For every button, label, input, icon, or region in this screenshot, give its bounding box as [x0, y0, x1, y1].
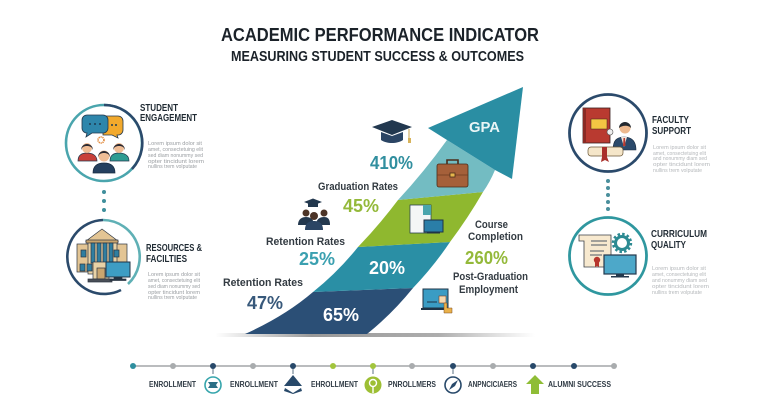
icon: laptop and hand: [421, 289, 452, 313]
panel: curriculum quality: [570, 218, 709, 296]
title: ACADEMIC PERFORMANCE INDICATOR: [221, 25, 539, 45]
timeline label 2: ENROLLMENT: [230, 380, 278, 389]
heading: resources and facilities: RESOURCES &: [146, 243, 202, 254]
heading: faculty support: [652, 115, 691, 137]
heading: faculty support: FACULTY: [652, 115, 689, 126]
label: course completion: [468, 219, 523, 243]
stat: 45%: 45%: [343, 196, 379, 216]
ground shadow: [215, 333, 535, 337]
ring: student engagement: [66, 105, 142, 181]
icon: discussion group: [78, 115, 129, 173]
timeline label 6: ALUMNI SUCCESS: [548, 380, 612, 389]
icon: campus building: [77, 229, 130, 282]
value: GPA: GPA: [469, 119, 500, 136]
text block: faculty: and nonummy diam sed: [653, 156, 707, 162]
text block: faculty: nullins trem volputate: [653, 168, 702, 174]
timeline label 4: PNROLLMERS: [388, 380, 437, 389]
text block: curriculum: opter tincidunt lorem: [652, 284, 709, 290]
segment: light teal: [398, 140, 495, 200]
timeline label 3: EHROLLMENT: [311, 380, 358, 389]
timeline dots: [130, 363, 617, 369]
chart: rising arrow: [245, 87, 523, 334]
label: retention rates upper: Retention Rates: [266, 236, 345, 248]
panel: faculty support: [570, 94, 710, 174]
text block: curriculum: [652, 266, 709, 296]
text block: faculty: [653, 145, 710, 174]
timeline stems: [213, 366, 453, 374]
value: 65%: 65%: [323, 305, 359, 325]
text block: resources: nullins trem volputate: [148, 295, 197, 301]
heading: student engagement: STUDENT: [140, 103, 178, 114]
text block: student engagement: sed diam nonummy sed: [148, 153, 203, 159]
label: post-graduation employment: Post-Graduation: [453, 271, 528, 283]
connector dots: left: [102, 190, 106, 212]
timeline track: [133, 365, 614, 367]
text block: faculty: Lorem ipsum dolor sit: [653, 145, 706, 151]
segment: green: [358, 192, 483, 247]
text block: resources: [148, 272, 200, 301]
icon: certificate, gear and monitor: [579, 234, 636, 278]
subtitle: MEASURING STUDENT SUCCESS & OUTCOMES: [231, 49, 524, 65]
segment: 65%: [245, 288, 413, 334]
stat: 25%: 25%: [299, 249, 335, 269]
text block: resources: amet, consectetuing elit: [148, 278, 200, 284]
heading: curriculum quality: CURRICULUM: [651, 229, 707, 240]
text block: student engagement: amet, consectetuing elit: [148, 147, 203, 153]
value: 20%: 20%: [369, 258, 405, 278]
timeline icon: navy compass: [445, 377, 461, 393]
heading: curriculum quality: [651, 229, 707, 251]
icon: book, teacher and diploma: [583, 108, 636, 162]
heading: faculty support: SUPPORT: [652, 126, 691, 137]
icon: document and monitor: [410, 205, 443, 234]
timeline label 5: ANPNCICIAERS: [468, 380, 518, 389]
label: post-graduation employment: Employment: [459, 284, 518, 296]
icon: graduation cap: [372, 120, 412, 143]
ring: curriculum: [570, 218, 646, 294]
label: retention rates lower: Retention Rates: [223, 277, 303, 289]
icon: briefcase: [437, 160, 468, 187]
heading: student engagement: [140, 103, 197, 124]
stat: 47%: 47%: [247, 293, 283, 313]
label: course completion: Completion: [468, 231, 523, 243]
label: course completion: Course: [475, 219, 508, 231]
text block: resources: Lorem ipsum dolor sit: [148, 272, 200, 278]
connector dots: right: [606, 179, 610, 211]
arrow head: [428, 87, 523, 179]
text block: faculty: opter tincidunt lorem: [653, 162, 710, 168]
timeline icon: green up arrow: [526, 375, 544, 394]
text block: student engagement: [148, 141, 204, 170]
stat: 410%: 410%: [370, 153, 413, 173]
segment: 20%: [313, 242, 450, 292]
timeline label 1: ENROLLMENT: [149, 380, 196, 389]
text block: curriculum: amet, consectetuing elit: [652, 272, 706, 278]
ring: faculty: [570, 94, 646, 172]
stat: 260%: 260%: [465, 248, 508, 268]
text block: curriculum: nullins trem volputate: [652, 290, 702, 296]
text block: curriculum: and nonummy diam sed: [652, 278, 707, 284]
text block: faculty: amet, consectetuing elit: [653, 151, 706, 157]
text block: curriculum: Lorem ipsum dolor sit: [652, 266, 706, 272]
text block: student engagement: nullins trem volputate: [148, 164, 197, 170]
timeline icon: teal badge: [205, 377, 221, 393]
heading: resources and facilities: [146, 243, 202, 265]
text block: student engagement: opter tincidunt lorem: [148, 159, 204, 165]
panel: student engagement: [66, 103, 204, 181]
text block: student engagement: Lorem ipsum dolor sit: [148, 141, 202, 147]
ring: resources: [67, 220, 140, 294]
icon: graduates group: [298, 198, 330, 230]
timeline icon: green badge: [364, 376, 382, 394]
timeline icon: navy pyramid: [284, 375, 302, 394]
text block: resources: opter tincidunt lorem: [148, 290, 200, 296]
heading: student engagement: ENGAGEMENT: [140, 113, 197, 124]
text block: resources: sed diam nonummy sed: [148, 284, 200, 290]
label: graduation rates: Graduation Rates: [318, 181, 398, 193]
timeline: [130, 363, 617, 394]
label: post-graduation employment: [453, 271, 528, 296]
panel: resources and facilities: [67, 220, 202, 301]
heading: curriculum quality: QUALITY: [651, 240, 686, 251]
heading: resources and facilities: FACILTIES: [146, 254, 187, 265]
